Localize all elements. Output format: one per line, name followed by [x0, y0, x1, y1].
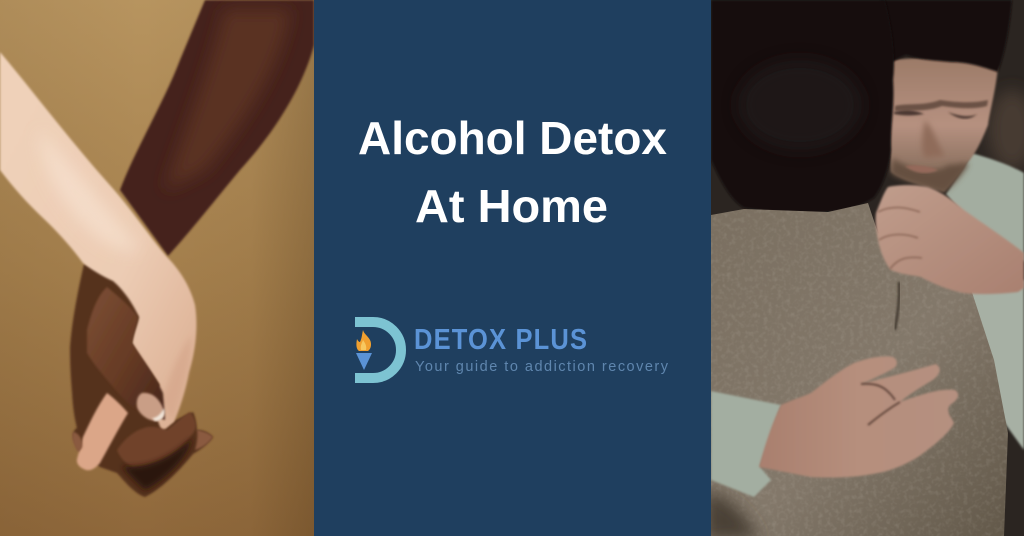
logo: Detox Plus	[355, 322, 669, 378]
palm shading	[165, 345, 189, 408]
sweater seam	[895, 282, 899, 330]
upper hand	[876, 185, 1024, 294]
dark hand	[70, 264, 213, 497]
background glow	[988, 90, 1024, 170]
dark arm	[120, 0, 314, 256]
thumbnail	[137, 393, 164, 421]
sweater texture	[711, 200, 1011, 536]
title: Alcohol Detox	[358, 112, 667, 164]
thumbnail tip	[152, 408, 165, 421]
light finger	[77, 393, 128, 470]
nose shadow	[922, 120, 945, 158]
shadow under fingers	[122, 438, 192, 490]
dark arm highlight	[165, 10, 290, 190]
logo mark: letter D	[355, 322, 401, 378]
partner's hair	[711, 0, 894, 213]
panel: centre navy column	[314, 0, 711, 536]
sweater lower shadow	[705, 490, 760, 536]
finger creases	[878, 207, 922, 269]
finger creases	[861, 384, 900, 425]
partner's wool sweater	[705, 200, 1011, 536]
logo tagline: Your guide to addiction recovery	[415, 359, 669, 375]
man's sweater shoulder	[946, 153, 1024, 262]
lower hand	[759, 356, 958, 478]
light arm and palm	[0, 52, 196, 432]
title	[358, 112, 667, 232]
dark fingers	[117, 412, 196, 467]
dark thumb	[87, 287, 165, 420]
hair sheen	[746, 68, 854, 142]
panel: embracing couple photo	[705, 0, 1024, 536]
man's face	[890, 58, 998, 192]
closed eyes	[894, 110, 977, 119]
panel: clasped hands photo	[0, 0, 314, 536]
man's sleeve	[972, 280, 1024, 450]
mouth and beard	[891, 158, 968, 192]
title: At Home	[415, 180, 608, 232]
icon: torch flame	[356, 330, 372, 370]
brow shadow	[895, 100, 988, 111]
man's hair	[880, 0, 1012, 72]
light arm highlight	[44, 145, 133, 250]
little finger tips	[72, 430, 213, 452]
logo wordmark: DETOX PLUS	[414, 322, 587, 355]
lips	[905, 165, 938, 173]
man's cuff	[711, 391, 781, 497]
